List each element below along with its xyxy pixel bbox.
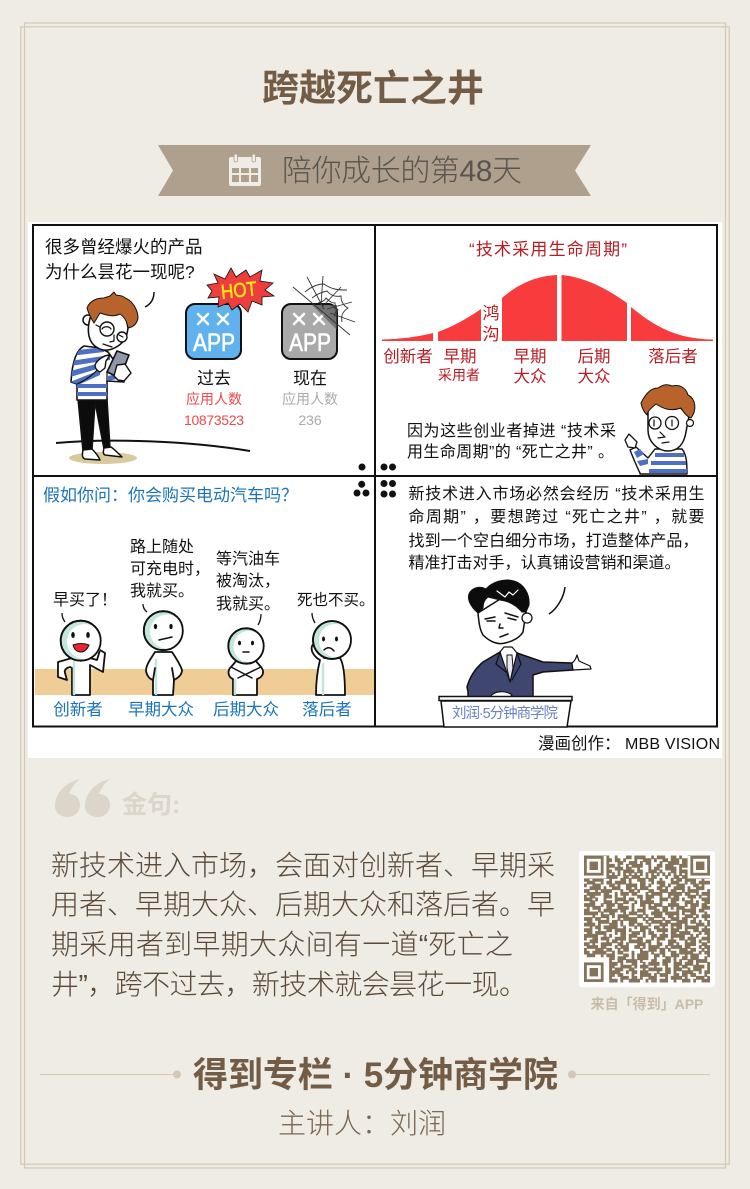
panel 4: conclusion [375, 476, 717, 727]
quote text: 新技术进入市场，会面对创新者、早期采 [51, 850, 555, 881]
speech bubbles [53, 538, 375, 613]
panel 1: apps that faded [33, 225, 375, 476]
curve labels: 早期 [514, 347, 546, 366]
present stats: 现在 [293, 369, 327, 388]
quote text: 期采用者到早期大众间有一道“死亡之 [51, 929, 513, 960]
footer column title [40, 1056, 710, 1095]
panel 1 question: 为什么昙花一现呢? [45, 262, 195, 282]
group labels: 后期大众 [213, 700, 279, 719]
comic sheet [28, 222, 722, 758]
panel 2 title: “技术采用生命周期” [469, 240, 627, 259]
speech bubbles: 我就买。 [130, 582, 194, 600]
quote text: 用者、早期大众、后期大众和落后者。早 [51, 889, 555, 920]
QR code [579, 851, 715, 987]
chasm label: 沟 [482, 325, 500, 344]
app icon: hot past app: APP [193, 329, 235, 357]
figure: late majority [228, 628, 264, 695]
podium [439, 696, 572, 727]
panel 3: electric car survey [33, 476, 375, 726]
QR caption: 来自「得到」APP [591, 996, 703, 1012]
figure speech ticks [62, 604, 315, 625]
credit: 漫画创作： [538, 735, 620, 753]
sand band [35, 669, 374, 695]
title: 跨越死亡之井 [262, 68, 484, 109]
character: presenter [467, 580, 591, 697]
panel 3 question: 假如你问：你会购买电动汽车吗？ [43, 486, 298, 505]
past stats: 10873523 [184, 412, 244, 428]
figure: laggard [312, 621, 352, 695]
curve labels: 大众 [514, 367, 546, 386]
curve labels: 大众 [578, 367, 610, 386]
figure: innovator [58, 621, 105, 695]
past stats: 应用人数 [186, 391, 242, 407]
panel 2: adoption life cycle [375, 225, 717, 476]
group labels: 落后者 [302, 700, 352, 719]
curve labels: 后期 [578, 347, 610, 366]
panel 4 text: 找到一个空白细分市场，打造整体产品， [408, 532, 698, 550]
present stats [282, 369, 338, 428]
icon: cobweb [293, 276, 355, 335]
curve labels: 创新者 [383, 347, 433, 366]
group labels: 早期大众 [128, 700, 194, 719]
icon: calendar [229, 154, 261, 186]
speech bubbles: 早买了！ [53, 591, 117, 609]
ground and shadow [56, 441, 250, 464]
quote text: 井”，跨不过去，新技术就会昙花一现。 [51, 969, 527, 1000]
curve labels: 落后者 [648, 347, 698, 366]
panel 2 explanation: 用生命周期”的 “死亡之井” 。 [407, 443, 614, 461]
present stats: 236 [298, 412, 322, 428]
speech bubbles: 被淘汰， [216, 572, 280, 590]
speech bubbles: 路上随处 [130, 538, 194, 556]
panel 1 question: 很多曾经爆火的产品 [45, 237, 202, 257]
podium: 刘润·5分钟商学院 [452, 705, 558, 722]
app icon: dead present app: APP [289, 329, 331, 357]
credit: MBB VISION [625, 736, 720, 753]
group labels: 创新者 [53, 700, 103, 719]
footer column title: 得到专栏 · 5分钟商学院 [193, 1056, 558, 1095]
panel 2 explanation: 因为这些创业者掉进 “技术采 [407, 422, 616, 440]
speech bubbles: 可充电时， [130, 560, 210, 578]
figure: early majority [144, 611, 184, 695]
golden quote heading: 金句: [122, 791, 180, 819]
past stats: 过去 [197, 369, 231, 388]
app icon: dead present app [282, 276, 355, 359]
panel 4 text: 新技术进入市场必然会经历 “技术采用生 [408, 485, 704, 503]
speech bubbles: 我就买。 [216, 595, 280, 613]
character: pointing boy [625, 385, 695, 474]
badge: hot: HOT [220, 278, 258, 304]
banner text: 陪你成长的第48天 [282, 155, 522, 188]
curve labels [383, 347, 698, 386]
speech bubbles: 死也不买。 [297, 591, 375, 609]
present stats: 应用人数 [282, 391, 338, 407]
speech tick [549, 587, 565, 614]
icon: quotation mark [55, 779, 110, 817]
chasm label: 鸿 [482, 304, 500, 323]
curve labels: 早期 [444, 347, 476, 366]
panel 4 text: 精准打击对手，认真铺设营销和渠道。 [408, 554, 680, 572]
chart: bell curve segments [382, 275, 713, 341]
panel 4 text: 命周期” ，要想跨过 “死亡之井” ，就要 [408, 508, 704, 526]
app icon: hot past app [186, 268, 274, 359]
character: man looking at phone [70, 292, 138, 460]
lecturer: 主讲人：刘润 [278, 1108, 446, 1139]
banner: day counter [158, 145, 591, 196]
curve labels: 采用者 [438, 367, 480, 383]
group labels [53, 700, 352, 719]
speech bubbles: 等汽油车 [216, 550, 280, 568]
golden quote heading [55, 779, 180, 819]
past stats [184, 369, 244, 428]
speech tick [145, 292, 154, 307]
